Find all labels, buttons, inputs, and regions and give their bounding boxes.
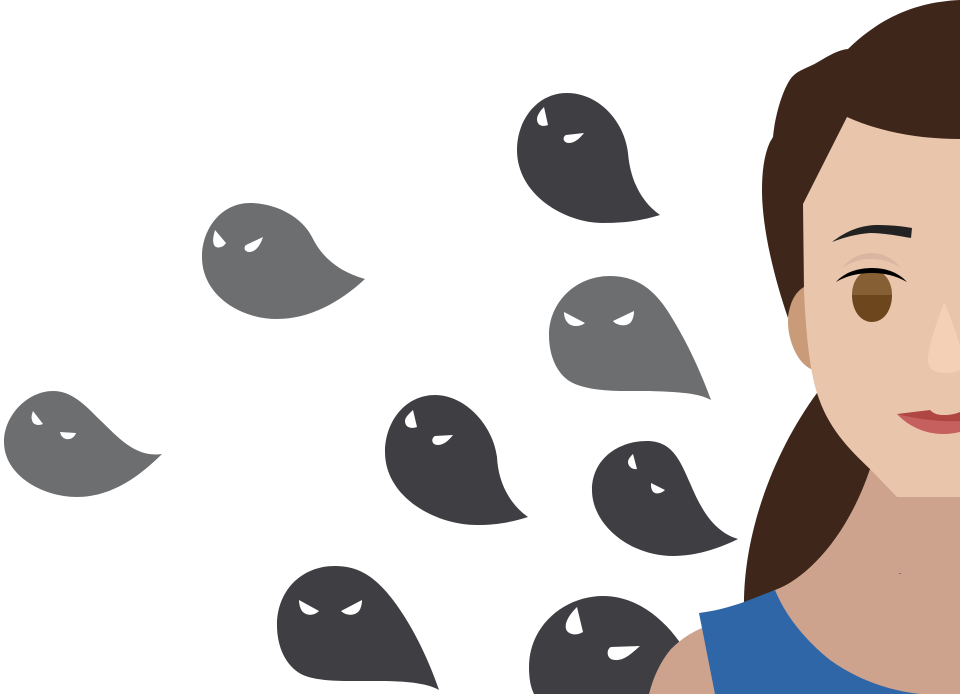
ghost: lower-right dark (592, 441, 738, 556)
ghost: bottom dark, behind shoulder (529, 596, 681, 694)
neck and chest (760, 469, 960, 694)
lower hair (744, 393, 870, 604)
eyelashes (836, 268, 907, 282)
ghost: upper-left grey (202, 203, 365, 319)
shoulder (649, 628, 716, 694)
blue top (699, 590, 920, 694)
face (803, 117, 960, 497)
nose (928, 302, 960, 373)
ghost: top dark (517, 93, 660, 223)
eyebrow (832, 225, 912, 242)
neck mark (899, 573, 901, 574)
ghost: right grey (549, 276, 711, 400)
ear (788, 286, 825, 370)
upper lip (897, 410, 960, 421)
ghost: centre dark (385, 395, 528, 525)
lower lip (897, 414, 960, 434)
iris (852, 270, 892, 322)
ghost: bottom-left dark (277, 566, 439, 690)
upper hair (762, 0, 960, 318)
eyelid shadow (842, 253, 901, 268)
ghost: far-left grey (4, 391, 162, 497)
woman (649, 0, 960, 694)
